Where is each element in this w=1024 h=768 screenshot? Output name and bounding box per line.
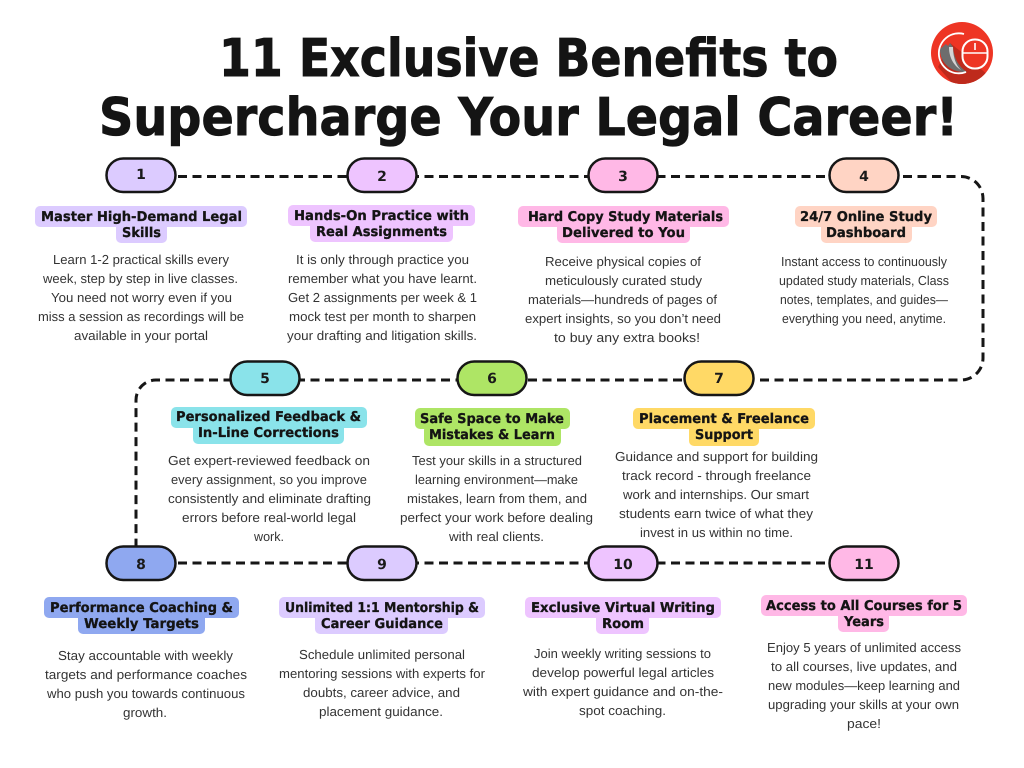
connector: dashed route through steps 8 to 11 <box>178 562 829 564</box>
number pill 3: 3 <box>618 169 628 185</box>
number pill 11 <box>830 546 898 580</box>
body 7: invest in us within no time. <box>640 525 793 540</box>
body 4: notes, templates, and guides— <box>780 292 948 307</box>
body 6: Test your skills in a structured <box>412 453 582 468</box>
body 2: mock test per month to sharpen <box>289 309 476 324</box>
number pill 3 <box>588 158 658 192</box>
number pill 1 <box>106 158 176 192</box>
title: 11 Exclusive Benefits to <box>219 29 838 89</box>
heading 10 <box>525 597 721 634</box>
heading 2: Hands-On Practice with <box>294 208 469 224</box>
heading 6: Safe Space to Make <box>420 411 564 427</box>
number pill 9 <box>348 546 416 580</box>
body 8 <box>45 648 248 720</box>
heading 9: Unlimited 1:1 Mentorship & <box>285 600 479 616</box>
number pill 5 <box>230 362 300 395</box>
heading 11 <box>761 595 967 632</box>
body 9: doubts, career advice, and <box>303 685 460 700</box>
body 4: Instant access to continuously <box>781 254 947 269</box>
body 8: who push you towards continuous <box>46 686 245 701</box>
body 4: updated study materials, Class <box>779 273 949 288</box>
number pill 8: 8 <box>136 557 146 573</box>
number pill 7: 7 <box>714 371 724 387</box>
number pill 2: 2 <box>377 169 387 185</box>
body 9 <box>279 647 486 719</box>
body 10: spot coaching. <box>579 703 666 718</box>
body 8: growth. <box>123 705 167 720</box>
number pill 7 <box>684 362 754 395</box>
heading 8: Performance Coaching & <box>50 600 233 616</box>
heading 11: Access to All Courses for 5 <box>766 598 962 614</box>
heading 4: 24/7 Online Study <box>800 209 932 225</box>
title <box>99 29 958 148</box>
body 5: every assignment, so you improve <box>171 472 367 487</box>
card 9 <box>279 546 486 719</box>
body 11: pace! <box>847 716 881 731</box>
body 11: to all courses, live updates, and <box>771 659 957 674</box>
body 9: Schedule unlimited personal <box>299 647 465 662</box>
card 11 <box>761 546 967 731</box>
body 1: available in your portal <box>74 328 208 343</box>
body 3: materials—hundreds of pages of <box>528 292 717 307</box>
heading 4 <box>795 206 937 243</box>
body 6: learning environment—make <box>415 472 578 487</box>
icon: logo with computer mouse <box>931 22 993 84</box>
heading 5 <box>171 407 367 444</box>
heading 6: Mistakes & Learn <box>429 427 555 443</box>
card 7 <box>615 362 818 540</box>
body 8: targets and performance coaches <box>45 667 248 682</box>
connector: dashed route through steps 1 to 8 <box>136 176 983 546</box>
body 3: meticulously curated study <box>545 273 703 288</box>
number pill 11: 11 <box>854 557 874 573</box>
body 10: with expert guidance and on-the- <box>522 684 723 699</box>
heading 5: In-Line Corrections <box>198 425 339 441</box>
body 7: track record - through freelance <box>622 468 811 483</box>
card 8 <box>44 546 248 720</box>
heading 9: Career Guidance <box>321 616 443 632</box>
body 1: You need not worry even if you <box>51 290 232 305</box>
card 6 <box>400 362 593 544</box>
heading 3 <box>518 206 729 243</box>
body 1: miss a session as recordings will be <box>38 309 244 324</box>
heading 3: Hard Copy Study Materials <box>528 209 723 225</box>
body 10 <box>522 646 723 718</box>
body 5: errors before real-world legal <box>182 510 356 525</box>
body 11: new modules—keep learning and <box>768 678 960 693</box>
number pill 10 <box>588 546 658 580</box>
body 1 <box>38 252 244 343</box>
body 11 <box>767 640 961 731</box>
number pill 10: 10 <box>613 557 633 573</box>
number pill 4 <box>830 158 898 192</box>
body 5: work. <box>253 529 284 544</box>
number pill 9: 9 <box>377 557 387 573</box>
body 10: Join weekly writing sessions to <box>534 646 711 661</box>
heading 2: Real Assignments <box>316 224 447 240</box>
card 10 <box>522 546 723 718</box>
body 8: Stay accountable with weekly <box>58 648 234 663</box>
body 6 <box>400 453 593 544</box>
body 2: your drafting and litigation skills. <box>287 328 477 343</box>
body 11: upgrading your skills at your own <box>768 697 959 712</box>
heading 8: Weekly Targets <box>84 616 199 632</box>
heading 3: Delivered to You <box>562 225 685 241</box>
body 10: develop powerful legal articles <box>532 665 715 680</box>
body 11: Enjoy 5 years of unlimited access <box>767 640 961 655</box>
heading 8 <box>44 597 239 634</box>
number pill 2 <box>348 158 416 192</box>
heading 10: Exclusive Virtual Writing <box>531 600 715 616</box>
heading 6 <box>415 408 570 446</box>
heading 1 <box>35 206 247 243</box>
body 3: expert insights, so you don’t need <box>525 311 721 326</box>
body 7: work and internships. Our smart <box>622 487 809 502</box>
card 3 <box>518 158 729 345</box>
heading 7: Support <box>695 427 754 443</box>
body 4: everything you need, anytime. <box>782 311 946 326</box>
body 7 <box>615 449 818 540</box>
card 2 <box>287 158 477 343</box>
body 1: week, step by step in live classes. <box>42 271 238 286</box>
heading 4: Dashboard <box>826 225 906 241</box>
heading 5: Personalized Feedback & <box>176 409 361 425</box>
heading 1: Skills <box>122 225 161 241</box>
body 5: Get expert-reviewed feedback on <box>168 453 370 468</box>
number pill 8 <box>106 546 176 580</box>
body 6: perfect your work before dealing <box>400 510 593 525</box>
body 9: mentoring sessions with experts for <box>279 666 486 681</box>
body 2: Get 2 assignments per week & 1 <box>288 290 477 305</box>
number pill 1: 1 <box>136 167 146 183</box>
number pill 6 <box>458 362 526 395</box>
body 2 <box>287 252 477 343</box>
body 2: remember what you have learnt. <box>288 271 477 286</box>
heading 2 <box>288 205 475 242</box>
body 9: placement guidance. <box>319 704 443 719</box>
heading 10: Room <box>602 616 644 632</box>
body 5 <box>168 453 371 544</box>
body 3: Receive physical copies of <box>545 254 701 269</box>
card 1 <box>35 158 247 343</box>
heading 1: Master High-Demand Legal <box>41 209 242 225</box>
body 6: with real clients. <box>448 529 544 544</box>
card 4 <box>779 158 949 326</box>
body 7: students earn twice of what they <box>619 506 814 521</box>
heading 7: Placement & Freelance <box>639 411 809 427</box>
body 5: consistently and eliminate drafting <box>168 491 371 506</box>
heading 9 <box>279 597 485 634</box>
title: Supercharge Your Legal Career! <box>99 88 958 148</box>
number pill 4: 4 <box>859 169 869 185</box>
body 2: It is only through practice you <box>296 252 469 267</box>
heading 11: Years <box>843 614 884 630</box>
heading 7 <box>633 408 815 446</box>
body 4 <box>779 254 949 326</box>
card 5 <box>168 362 371 544</box>
body 7: Guidance and support for building <box>615 449 818 464</box>
body 6: mistakes, learn from them, and <box>407 491 587 506</box>
body 1: Learn 1-2 practical skills every <box>53 252 229 267</box>
body 3 <box>525 254 721 345</box>
number pill 6: 6 <box>487 371 497 387</box>
body 3: to buy any extra books! <box>554 330 700 345</box>
number pill 5: 5 <box>260 371 270 387</box>
